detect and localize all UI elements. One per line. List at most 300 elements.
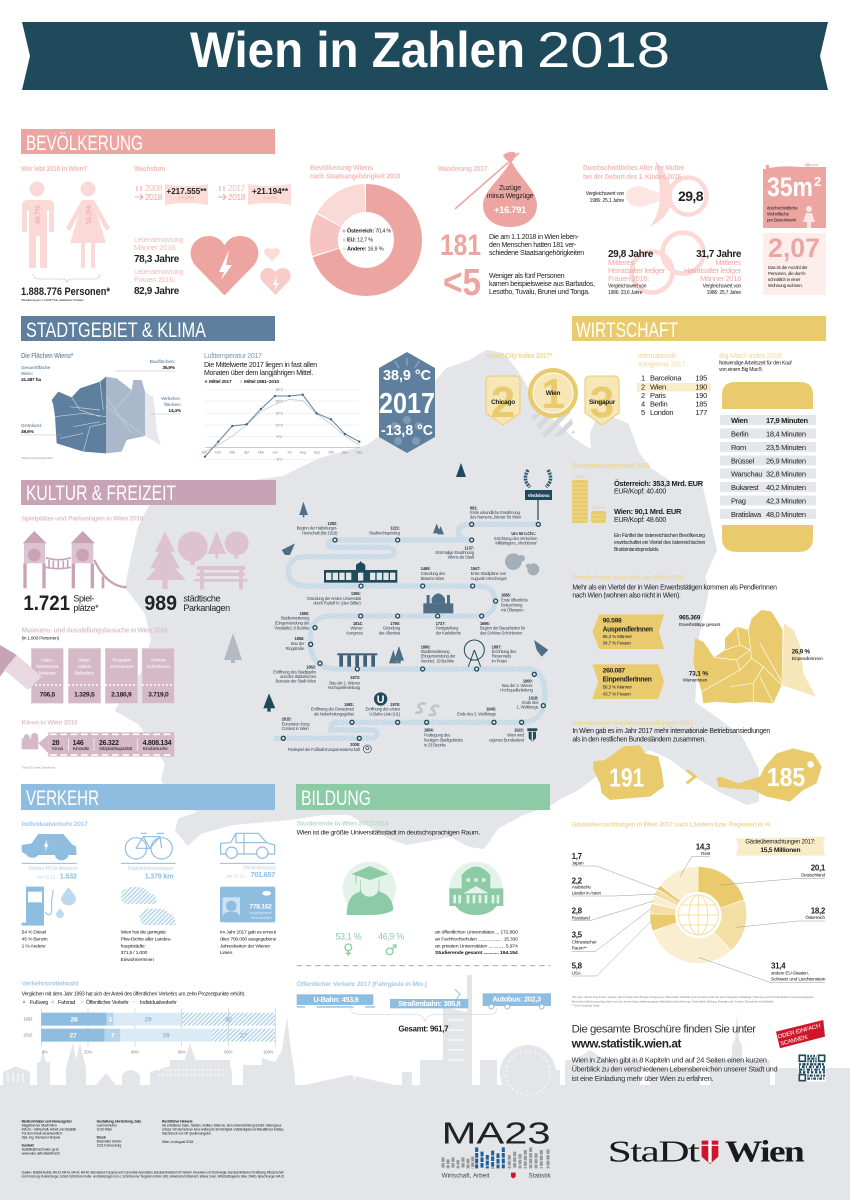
title banner: 2018 [537, 22, 670, 78]
panel: individual traffic: 45 % Benzin [22, 937, 48, 943]
timeline labels: Stadterweiterung [281, 616, 310, 621]
title banner [22, 22, 828, 90]
panel: marriage age: Männer 2016 [700, 274, 741, 283]
panel: land use: *Flächenzugehörigkeit 2016 [21, 456, 53, 460]
icon: annual ticket card [220, 887, 275, 922]
panel: who lives in Vienna: Wer lebt 2018 in Wien? [21, 164, 88, 173]
icon: QR code [798, 1054, 826, 1082]
panel: GDP: erwirtschaftet ein Viertel des österreichischen [614, 540, 706, 546]
panel: land use: Bauflächen: [150, 359, 176, 365]
icon: coat of arms [527, 728, 537, 742]
panel: museums [0, 628, 174, 703]
panel: growth: Wachstum [134, 164, 166, 173]
timeline labels: 881: [470, 505, 478, 510]
panel: museums: Galerie [77, 664, 92, 669]
icon: tram: Straßenbahn: 305,8 [398, 999, 461, 1008]
panel: individual traffic: EinwohnerInnen [121, 957, 154, 963]
timeline labels: Eröffnung des Stadtparks [273, 669, 316, 674]
panel: congress table: Internationale [638, 353, 677, 360]
panel: Big Mac index: Brüssel [731, 456, 755, 466]
panel: cinemas: 28 [52, 740, 60, 747]
panel: life expectancy: Lebenserwartung [134, 235, 183, 244]
panel: congress table: 190 [695, 391, 707, 400]
panel: cinemas: Kinobesuche [143, 746, 168, 751]
panel: Big Mac index: 42,3 Minuten [766, 496, 806, 506]
panel: congress table: London [650, 408, 673, 417]
donut labels: andere EU-Staaten, [771, 970, 809, 975]
icon: birds [282, 543, 548, 657]
panel: imprint: schluss: Wir übernehmen keine Haftung für die Richtigkeit, Vollständigkeit und Aktualität des Inhaltes. [162, 1128, 284, 1132]
icon: aqueduct [337, 653, 377, 667]
donut labels: Russland [572, 915, 590, 920]
map: Vienna land use [52, 377, 161, 453]
icon: film camera [22, 733, 48, 753]
panel: individual traffic: 371,5 / 1.000 [121, 950, 148, 956]
panel: migration: Die am 1.1.2018 in Wien leben- [489, 234, 580, 241]
panel: imprint [22, 1120, 284, 1178]
arrow: incoming commuters [592, 664, 664, 699]
panel: growth: 2008 [145, 183, 163, 193]
timeline labels: 1688: [501, 593, 511, 598]
icon: electric car [22, 834, 77, 860]
icon: clouds [121, 887, 176, 925]
icon: pacifier [626, 160, 706, 227]
timeline labels: Finalspiel der Fußball-Europameisterschaft [288, 747, 361, 752]
line chart: Jun [272, 450, 278, 454]
bar chart: 27 [240, 1033, 247, 1040]
panel: Big Mac index: Warschau [731, 470, 762, 478]
line chart: Jän [201, 450, 207, 454]
timeline labels [273, 505, 538, 752]
panel: congress table: Kongresse 2017 [638, 362, 685, 368]
line chart: Sep [314, 450, 320, 454]
line chart: -5°C [276, 458, 283, 462]
panel: congress table: Paris [650, 391, 666, 400]
callout: red scan stamp: ODER EINFACH [777, 1023, 821, 1041]
icon: globe [678, 895, 718, 935]
panel: temperature extremes hexagon [379, 352, 435, 453]
timeline labels: Augustin Hirschvogel [471, 576, 507, 581]
icon: burger top bun [722, 382, 813, 409]
timeline labels: Gründung des [421, 571, 445, 576]
timeline labels: Wiener [350, 626, 363, 631]
panel: growth: 2017 [228, 183, 246, 193]
panel: Smart City index [486, 353, 619, 438]
panel: individual traffic: Jahreskarten der Wiener [220, 943, 270, 949]
icon: female symbol [345, 944, 352, 956]
panel: students: 53,1 % [335, 932, 362, 942]
timeline labels: U-Bahn-Linie (U1) [369, 712, 401, 717]
panel: individual traffic: Pkw-Dichte aller Landes- [121, 937, 172, 943]
panel: Big Mac index: 23,5 Minuten [766, 443, 806, 452]
panel: individual traffic: Im Jahr 2017 gab es erneut [220, 929, 277, 935]
panel: commuters: Mehr als ein Viertel der in Wien Erwerbstätigen kommen als PendlerInnen [572, 585, 777, 592]
panel: who lives in Vienna: *Bevölkerung am 1.1.2018 **inkl. statistischer Korrektur [21, 298, 84, 302]
timeline labels: 2015: [282, 717, 291, 722]
bar chart: 40% [131, 1049, 139, 1054]
donut labels: Japan [572, 861, 584, 866]
icon: metro train: U-Bahn: 453,6 [313, 995, 359, 1004]
icon: lightning [219, 250, 232, 280]
panel: Big Mac index: 17,9 Minuten [766, 416, 809, 425]
timeline labels: Riesenrads [492, 654, 511, 659]
panel: commuters: WienerInnen [683, 678, 708, 683]
timeline labels: Bistums Wien [421, 576, 445, 581]
panel: museums: Schönbrunn [147, 664, 171, 669]
callout: total overnight stays: Gästeübernachtungen 2017: [745, 839, 816, 845]
icon: growth arrow [218, 186, 226, 200]
panel: congress table [637, 353, 711, 417]
panel: temperature chart: Die Mittelwerte 2017 liegen in fast allen [204, 360, 317, 369]
panel: living space: Wohnfläche [767, 212, 790, 216]
timeline labels: eigenes Bundesland [489, 738, 525, 743]
panel: museums: 2.180,9 [111, 691, 132, 698]
panel: GDP: 25,5 % [593, 505, 605, 510]
donut labels: 1,7 [572, 852, 583, 861]
panel: commuters: PendlerInnen nach und aus Wien 2015 [572, 574, 684, 581]
panel: Big Mac index: 40,2 Minuten [766, 483, 806, 492]
timeline labels: Vorstädte): 8 Bezirke [274, 625, 310, 630]
panel: museums: Museum [39, 671, 56, 676]
panel: Big Mac index: Prag [731, 496, 746, 506]
panel: migration: Lesotho, Tuvalu, Brunei und Tonga. [489, 289, 590, 296]
donut labels: Arabische [572, 885, 591, 890]
donut labels: Rest [701, 851, 711, 856]
donut labels: 5,8 [572, 961, 583, 970]
footnotes: *Für den „Smart City Index“ werden die fünf Bereiche Bürger, Regierung, Wirtschaft, Mobilität und Umwelt sowie die drei Kategorien Strategie, Planung und IT-Infrastruktur zusammengefasst [572, 996, 814, 999]
panel: GDP: Österreich: 353,3 Mrd. EUR [614, 479, 704, 488]
panel: museums: Schloss [151, 657, 167, 662]
timeline labels: Stadtrechtsprivileg [369, 530, 401, 535]
timeline labels: Ende des [522, 700, 538, 705]
panel: land use: 41.487 ha [21, 377, 41, 383]
timeline labels: Gründung [383, 626, 401, 631]
timeline labels: 1137: [464, 545, 474, 550]
panel: marriage age: Heiratsalter lediger [684, 266, 742, 275]
callout: total overnight stays: 15,5 Millionen [760, 847, 800, 854]
icon: medal 1: 1 [541, 370, 565, 417]
panel: land use: Gesamtfläche [21, 365, 51, 371]
timeline labels: Erste öffentliche [501, 598, 529, 603]
panel: cinemas: 26.322 [99, 740, 119, 747]
panel: playgrounds and parks: plätze* [73, 603, 99, 613]
icon: large heart [191, 236, 258, 295]
panel: land use: Grünland: [21, 423, 43, 429]
panel: individual traffic: Wien hat die geringste [121, 929, 166, 935]
donut labels: Länder in Asien [572, 891, 602, 896]
timeline labels: 1873: [350, 675, 360, 680]
timeline labels: Hochquellenleitung [328, 685, 361, 690]
panel: brochure call to action: Wien in Zahlen gibt in 8 Kapiteln und auf 24 Seiten einen kurzen [572, 1057, 767, 1064]
panel: GDP: Bruttoinlandsprodukts. [614, 547, 659, 553]
panel: playgrounds and parks [22, 515, 249, 615]
map: Austria 185: 185 [767, 762, 805, 792]
panel: living space: 2 [814, 174, 821, 189]
map: commuter share [693, 610, 816, 703]
panel: persons per household: Das ist die Anzahl der [768, 265, 808, 270]
panel: museums: (in 1.000 Personen) [22, 635, 60, 640]
timeline labels: 1282: [328, 521, 337, 526]
bar chart: 60% [178, 1049, 186, 1054]
leader lines [572, 857, 825, 982]
panel: persons per household: 2,07 [768, 233, 820, 263]
panel: age of mother: bei der Geburt des 1. Kindes 2016 [583, 172, 681, 181]
panel: congress table: 2 [641, 391, 645, 400]
panel: commuters: AuspendlerInnen [603, 624, 653, 633]
panel: migration: Zuzüge [499, 185, 521, 192]
panel: modal split [22, 981, 275, 1054]
panel: Big Mac index: Notwendige Arbeitszeit für den Kauf [719, 360, 792, 366]
panel: imprint: Nachdruck nur mit Quellenangabe. [162, 1132, 212, 1136]
icon: wedding rings [632, 232, 704, 292]
timeline labels: Um 50 n.Chr.: [511, 531, 536, 536]
panel: individual traffic: 1.379 km [145, 872, 174, 881]
donut labels: USA [572, 970, 582, 975]
bar chart: 28 [71, 1017, 78, 1024]
panel: cinemas: 146 [73, 740, 84, 747]
timeline labels: 1850: [300, 611, 309, 616]
donut labels: 2,2 [572, 876, 583, 885]
panel: imprint: statistik@ma23.wien.gv.at [22, 1148, 59, 1152]
panel: brochure call to action: ist eine Einladung mehr über Wien zu erfahren. [572, 1076, 714, 1083]
ticket cards [31, 648, 174, 703]
panel: temperature extremes hexagon: 38,9 °C [383, 367, 431, 384]
panel: congress table: 185 [695, 400, 707, 408]
icon: university building [324, 561, 397, 583]
title banner: Wien in Zahlen [190, 22, 525, 78]
timeline labels: 1. Weltkriegs [517, 705, 538, 710]
donut labels [572, 842, 826, 981]
arrow: greater than [687, 770, 695, 783]
panel: temperature extremes hexagon: -13,8 °C [381, 422, 433, 439]
map: Austria 185 [717, 748, 822, 802]
icon: shield 2: Chicago [491, 399, 515, 406]
line chart: Jul [287, 450, 292, 454]
panel: individual traffic: Radverkehrsanlagen [128, 866, 174, 872]
panel: temperature extremes hexagon: 2017 [379, 388, 435, 420]
panel: commuters: EinpendlerInnen [603, 674, 652, 683]
panel: temperature chart: Lufttemperatur 2017 [204, 353, 262, 360]
bar chart: 2016 [23, 1033, 33, 1038]
arrow: outgoing commuters [592, 614, 664, 649]
icon: burger bottom bun [722, 525, 813, 552]
panel: imprint: Kontakt [22, 1144, 35, 1148]
panel: imprint: Magistrat der Stadt Wien [22, 1124, 57, 1128]
panel: life expectancy: Männer 2016: [134, 243, 177, 252]
icon: male symbol [386, 945, 396, 955]
panel: museums: Belvedere [75, 671, 95, 676]
panel: museums: Schönbrunn [110, 664, 134, 669]
panel: congress table: 1 [641, 374, 645, 382]
line chart: Aug [300, 450, 306, 454]
panel: persons per household: Personen, die durch- [768, 271, 807, 276]
panel: Big Mac index: Big Mac®-Index 2016 [719, 352, 781, 360]
icon: hatch below medal [530, 410, 575, 438]
panel: imprint: www.wien.at/kontakt/ma23 [22, 1152, 60, 1156]
film strip [48, 732, 174, 757]
panel: marriage age: 29,8 Jahre [608, 249, 654, 260]
timeline labels: Eröffnung der Donauinsel [311, 707, 354, 712]
panel: modal split: Verglichen mit dem Jahr 1993 hat sich der Anteil des öffentlichen Verkehrs um zehn Prozentpunkte erhöht. [22, 991, 245, 997]
panel: imprint: MA 23 – Wirtschaft, Arbeit und Statistik [22, 1128, 76, 1132]
timeline stops [281, 522, 545, 740]
panel: nationality donut: nach Staatsangehörigkeit 2018 [310, 172, 400, 180]
panel: GDP [572, 463, 706, 553]
icon: shield 3: Singapur [589, 399, 616, 406]
panel: marriage age: 31,7 Jahre [696, 249, 742, 260]
panel: imprint: Für den Inhalt verantwortlich: [22, 1131, 63, 1135]
panel: museums: Natur- [41, 657, 54, 662]
timeline labels: Herrschaft (bis 1918) [302, 530, 338, 535]
panel: cinemas: Kinos in Wien 2016 [22, 719, 78, 726]
line chart: Nov [342, 450, 348, 454]
panel: GDP: 100 % [574, 474, 585, 479]
bar chart: 29 [145, 1017, 152, 1024]
timeline labels: Ende des 2. Weltkriegs [457, 712, 496, 717]
panel: individual traffic: 1.532 [60, 872, 77, 881]
timeline labels: Beginn der Bauarbeiten für [480, 626, 526, 631]
bar chart: 20% [84, 1049, 92, 1054]
timeline labels: Gründung der ersten Universität [307, 596, 362, 601]
icon: U-Bahn sign: U [377, 694, 385, 706]
panel: Big Mac index [719, 352, 816, 552]
footnotes: Besondere Bedeutung liegt dabei auf den sechs Nationalitätengruppen Mobilität für Bevölkerung, Gesundheit, Bildung, Energie und Umwelt, Sicherheit und Mobilität [572, 1000, 774, 1003]
panel: individual traffic: per 31.12.: [37, 874, 57, 879]
timeline labels: 1890: [421, 644, 430, 649]
panel: commuters: EinpendlerInnen [792, 656, 823, 661]
panel: Bildung heading [296, 784, 550, 810]
panel: growth: +217.555** [166, 187, 207, 196]
panel: individual traffic: Individualverkehr 2017 [22, 821, 88, 828]
icon: university [449, 862, 503, 915]
panel: commuters: 73,1 % [689, 671, 708, 678]
panel: individual traffic: Elektro-PKW-Bestand [29, 866, 77, 872]
line chart: 25°C [276, 388, 284, 392]
timeline labels: Fertigstellung [436, 626, 459, 631]
panel: temperature chart: Monaten über dem langjährigen Mittel. [204, 368, 313, 377]
panel: migration: Wanderung 2017 [438, 164, 487, 173]
timeline labels: 1858: [295, 636, 304, 641]
panel: individual traffic: PKW-Bestand [244, 865, 275, 871]
panel: age of mother: Durchschnittliches Alter der Mutter [583, 163, 684, 172]
panel: growth: (+1,1%) [264, 195, 277, 200]
timeline labels: Erste urkundliche Erwähnung [470, 510, 521, 515]
timeline labels: das Schloss Schönbrunn [480, 630, 523, 635]
timeline labels: Wien wird [507, 733, 525, 738]
panel: museums: Museums- und Ausstellungsbesuche in Wien 2016 [22, 628, 168, 635]
donut labels: 18,2 [811, 906, 826, 915]
icon: football [363, 745, 371, 753]
bar chart: 0% [42, 1049, 48, 1054]
panel: migration: +16.791 [494, 205, 527, 216]
donut legend: EU: 12,7 % [347, 238, 373, 244]
panel: Big Mac index: Rom [731, 443, 746, 452]
icon: medium heart [260, 268, 291, 295]
panel: Big Mac index: Berlin [731, 430, 749, 438]
footnotes [572, 996, 814, 1007]
donut labels: Schweiz und Liechtenstein [771, 976, 826, 981]
panel: nationality donut [310, 163, 408, 282]
panel: Big Mac index: 18,4 Minuten [766, 430, 806, 438]
panel: individual traffic [22, 821, 277, 963]
panel: Verkehr heading: VERKEHR [26, 787, 99, 810]
panel: business settlements: In Wien gab es im Jahr 2017 mehr internationale Betriebsansiedlungen [572, 728, 770, 735]
panel: Big Mac index: Wien [731, 416, 748, 425]
bar chart: 40 [225, 1017, 232, 1024]
panel: business settlements [572, 720, 822, 802]
panel: commuters: 26,9 % [792, 649, 810, 656]
panel: Big Mac index: von einem Big Mac®. [719, 366, 763, 373]
timeline labels: 2008: [350, 742, 360, 747]
panel: temperature chart: Mittel 2017 [209, 379, 232, 385]
timeline labels: 1945: [486, 707, 496, 712]
timeline labels: Militärlagers „Vindobona“ [495, 540, 538, 545]
icon: graduate [343, 862, 396, 915]
timeline labels: in 23 Bezirke [424, 743, 447, 748]
icon: bus [483, 993, 551, 1009]
timeline labels: Erste Stadtpläne von [471, 571, 507, 576]
panel: growth [134, 164, 291, 205]
panel: living space: durchschnittliche [767, 206, 798, 210]
panel: land use: 35,9% [162, 365, 176, 371]
stat: less than five: <5 [443, 262, 481, 304]
timeline labels: des Namens „Wenia“ für Wien [470, 515, 522, 520]
footnotes: ** China, Hongkong, Taiwan [572, 1004, 601, 1007]
panel: persons per household: schnittlich in einer [768, 277, 801, 282]
bar chart: 39 [163, 1033, 170, 1040]
chart legend: Individualverkehr [140, 1000, 177, 1006]
timeline labels: Bau der 1. Wiener [329, 680, 361, 685]
panel: business settlements: als in den restlichen Bundesländern zusammen. [572, 736, 706, 743]
timeline labels: (Eingemeindung der [275, 620, 310, 625]
timeline labels: heutigen Stadtgebietes [424, 738, 463, 743]
panel: playgrounds and parks: städtische [183, 594, 221, 604]
timeline labels: 1900: [523, 678, 533, 683]
donut labels: 20,1 [811, 864, 826, 873]
panel: museums: Österr. [78, 656, 91, 662]
donut labels: Chinesischer [572, 940, 597, 945]
panel: Big Mac index: 26,9 Minuten [766, 456, 806, 466]
panel: commuters: 43,7 % Frauen [603, 691, 631, 696]
donut labels: 31,4 [771, 961, 786, 970]
student statistics: an Fachhochschulen ..................... 15.330 [435, 937, 518, 943]
panel: Big Mac index: 48,0 Minuten [766, 510, 806, 519]
icon: metro train [297, 994, 375, 1007]
timeline labels: Bau der 2. Wiener [502, 683, 533, 688]
panel: age of mother: Vergleichswert von [586, 191, 624, 197]
icon: shield 3: 3 [590, 378, 614, 427]
student statistics: an öffentlichen Universitäten.... 172.850 [435, 929, 518, 935]
panel: land use: 49,6% [21, 429, 35, 435]
panel: life expectancy: 78,3 Jahre [134, 254, 180, 265]
panel: land use: 14,4% [168, 408, 182, 414]
panel: growth: (+13,0%) [179, 195, 195, 200]
map: Vienna 191 [593, 745, 664, 800]
stat: 181 nationalities: 181 [440, 229, 481, 262]
timeline labels: Stadterweiterung [421, 649, 450, 654]
panel: imprint: Wien, im August 2018. [162, 1140, 194, 1144]
panel: GDP: Wien: 90,1 Mrd. EUR [614, 507, 682, 516]
panel: students: Wien ist die größte Universitätsstadt im deutschsprachigen Raum. [297, 829, 480, 836]
timeline labels: 1922: [514, 728, 524, 733]
panel: marriage age: 1986: 25,7 Jahre [707, 290, 741, 296]
background: skyline [0, 975, 850, 1200]
bar chart: 27 [70, 1033, 77, 1040]
panel: imprint: Druck [97, 1136, 106, 1140]
panel: marriage age: Frauen 2016: [608, 274, 649, 283]
icon: squirrels [505, 553, 539, 575]
panel: growth: +21.194** [252, 187, 289, 196]
